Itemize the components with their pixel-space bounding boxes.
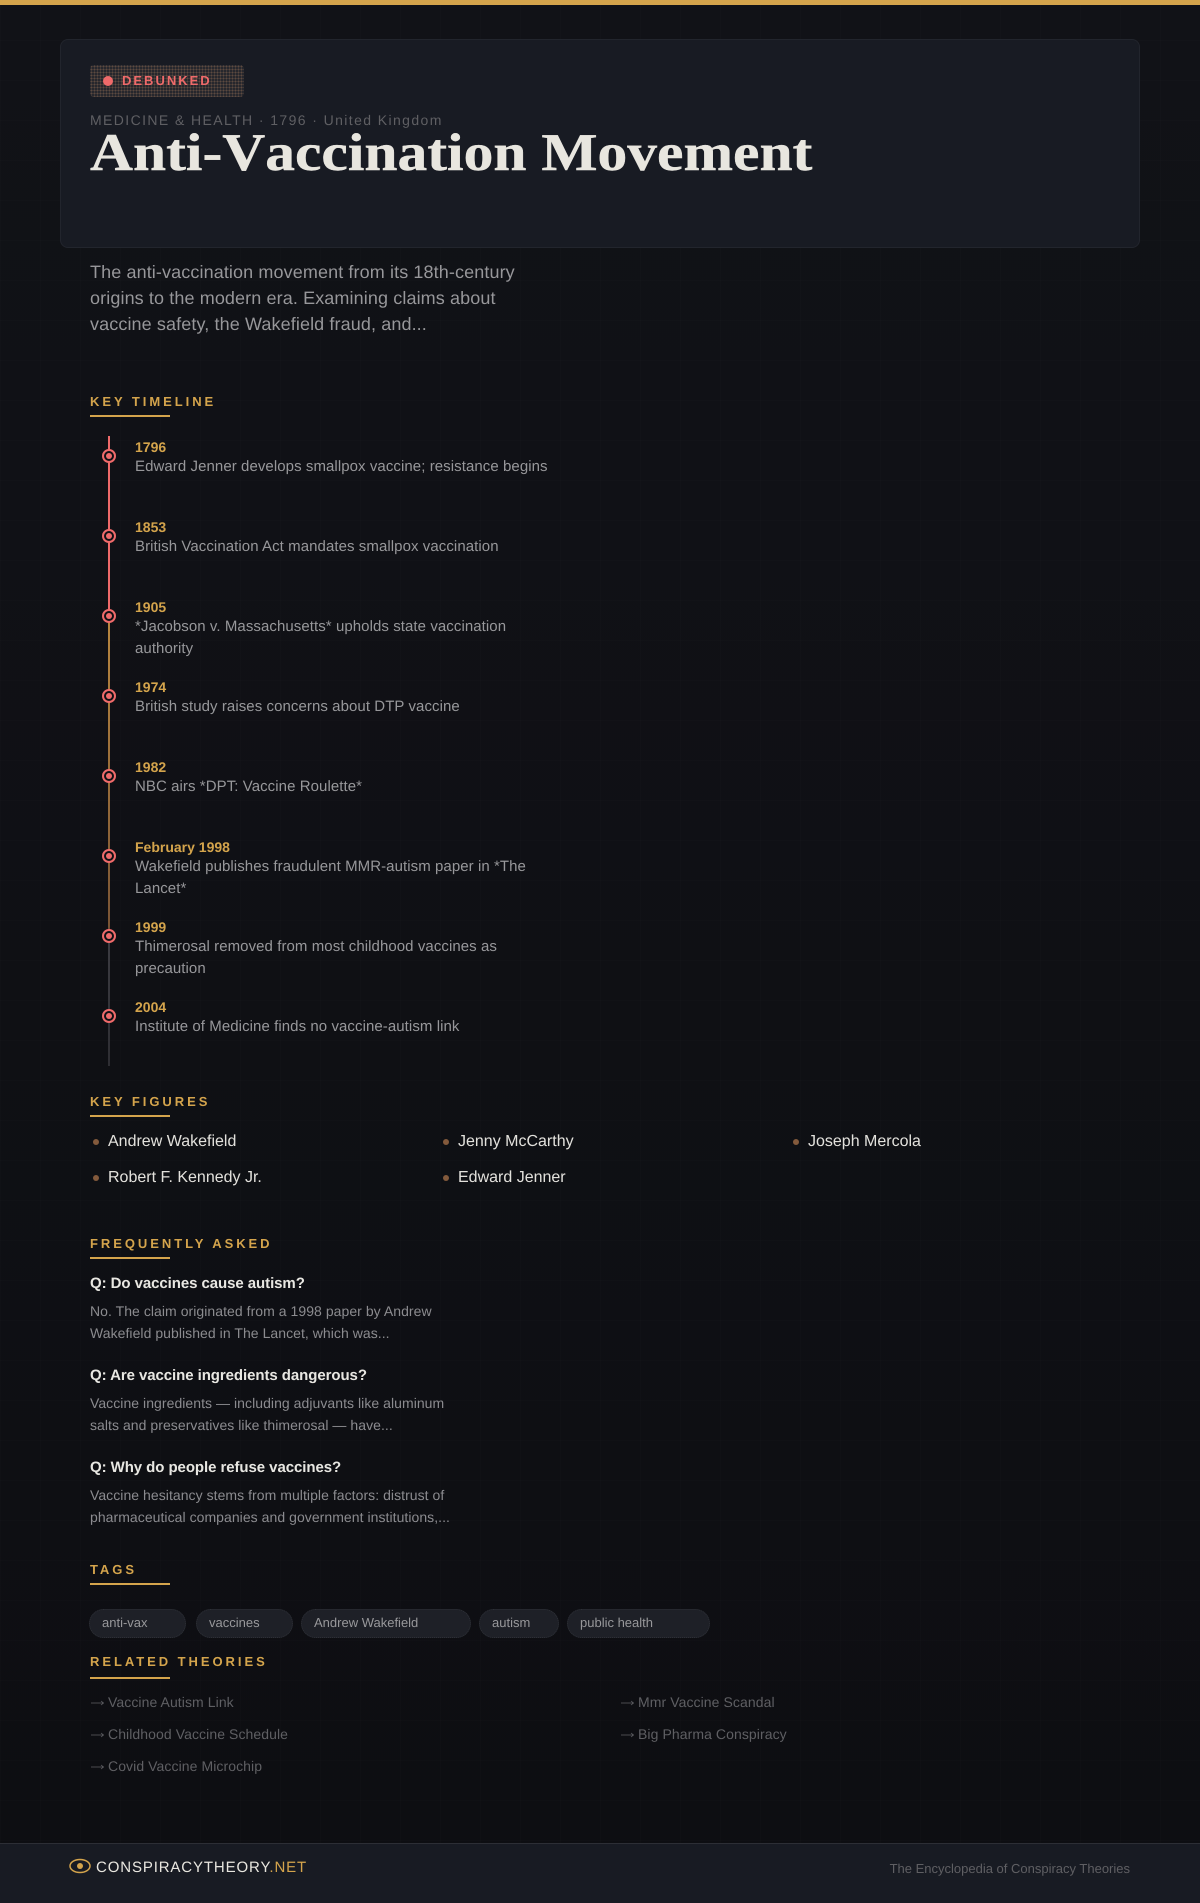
tag: public health (580, 1615, 653, 1630)
text: 1796 (135, 439, 166, 455)
faq question 1: Q: Do vaccines cause autism? (90, 1275, 305, 1292)
text: 1905 (135, 599, 166, 615)
timeline event 1999: Thimerosal removed from most childhood vaccines as precaution (135, 938, 497, 977)
faq answer 1: No. The claim originated from a 1998 paper by Andrew (90, 1303, 432, 1319)
faq answer 3: Vaccine hesitancy stems from multiple factors: distrust of (90, 1487, 444, 1503)
tag: vaccines (209, 1615, 260, 1630)
heading: key timeline: KEY TIMELINE (90, 394, 216, 409)
related link: Big Pharma Conspiracy (638, 1726, 787, 1742)
timeline event 1905: *Jacobson v. Massachusetts* upholds state vaccination authority (135, 618, 506, 657)
text: 2004 (135, 999, 166, 1015)
faq answer 1: Wakefield published in The Lancet, which was... (90, 1325, 390, 1341)
faq question 3: Q: Why do people refuse vaccines? (90, 1459, 341, 1476)
title: Anti-Vaccination Movement (90, 124, 812, 182)
related link: Vaccine Autism Link (108, 1694, 234, 1710)
footer tagline: The Encyclopedia of Conspiracy Theories (890, 1861, 1130, 1876)
timeline (108, 436, 110, 1066)
timeline event February 1998: Wakefield publishes fraudulent MMR-autism paper in *The Lancet* (135, 858, 526, 897)
text: 1999 (135, 919, 166, 935)
timeline event 1905 (102, 599, 506, 657)
intro text: The anti-vaccination movement from its 18th-century origins to the modern era. Examining claims about vaccine safety, the Wakefield fraud, and... (90, 262, 515, 334)
timeline event 1974: British study raises concerns about DTP vaccine (135, 698, 460, 715)
timeline event 2004 (102, 999, 460, 1035)
tag (196, 1609, 293, 1638)
text: February 1998 (135, 839, 230, 855)
category and date line: MEDICINE & HEALTH · 1796 · United Kingdom (90, 112, 443, 128)
timeline event 1796: Edward Jenner develops smallpox vaccine; resistance begins (135, 458, 548, 475)
tag (89, 1609, 186, 1638)
key figure: Andrew Wakefield (108, 1133, 236, 1150)
logo wordmark: CONSPIRACYTHEORY.NET (96, 1859, 307, 1876)
heading: key figures: KEY FIGURES (90, 1094, 210, 1109)
faq answer 3: pharmaceutical companies and government institutions,... (90, 1509, 450, 1525)
tag: Andrew Wakefield (314, 1615, 418, 1630)
top accent bar (0, 0, 1200, 5)
related link: Covid Vaccine Microchip (108, 1758, 262, 1774)
badge label: DEBUNKED (122, 73, 212, 88)
faq answer 2 (90, 1395, 444, 1433)
heading: related theories: RELATED THEORIES (90, 1654, 268, 1669)
faq question 2: Q: Are vaccine ingredients dangerous? (90, 1367, 367, 1384)
timeline event 1982 (102, 759, 362, 795)
text: 1853 (135, 519, 166, 535)
status badge: debunked (90, 65, 244, 97)
timeline event 1853: British Vaccination Act mandates smallpox vaccination (135, 538, 499, 555)
related link: Childhood Vaccine Schedule (108, 1726, 288, 1742)
icon: eye logo (69, 1858, 91, 1874)
tag: anti-vax (102, 1615, 148, 1630)
key figure: Robert F. Kennedy Jr. (108, 1169, 262, 1186)
tag (567, 1609, 710, 1638)
heading: frequently asked: FREQUENTLY ASKED (90, 1236, 273, 1251)
timeline event 1999 (102, 919, 497, 977)
faq answer 1 (90, 1303, 432, 1341)
tag (479, 1609, 559, 1638)
faq answer 2: salts and preservatives like thimerosal — have... (90, 1417, 393, 1433)
timeline event 1974 (102, 679, 460, 715)
faq answer 3 (90, 1487, 450, 1525)
faq answer 2: Vaccine ingredients — including adjuvants like aluminum (90, 1395, 444, 1411)
timeline line (108, 436, 110, 1066)
timeline event 1853 (102, 519, 499, 555)
text: 1974 (135, 679, 166, 695)
timeline event 1796 (102, 439, 548, 475)
timeline event 2004: Institute of Medicine finds no vaccine-autism link (135, 1018, 459, 1035)
timeline event February 1998 (102, 839, 526, 897)
badge dot (103, 76, 113, 86)
related link: Mmr Vaccine Scandal (638, 1694, 775, 1710)
footer (0, 1843, 1200, 1903)
timeline event 1982: NBC airs *DPT: Vaccine Roulette* (135, 778, 362, 795)
key figure: Edward Jenner (458, 1169, 566, 1186)
heading: tags: TAGS (90, 1562, 137, 1577)
key figure: Jenny McCarthy (458, 1133, 574, 1150)
text: 1982 (135, 759, 166, 775)
panel: header (60, 39, 1140, 248)
key figure: Joseph Mercola (808, 1133, 921, 1150)
tag: autism (492, 1615, 530, 1630)
tag (301, 1609, 471, 1638)
